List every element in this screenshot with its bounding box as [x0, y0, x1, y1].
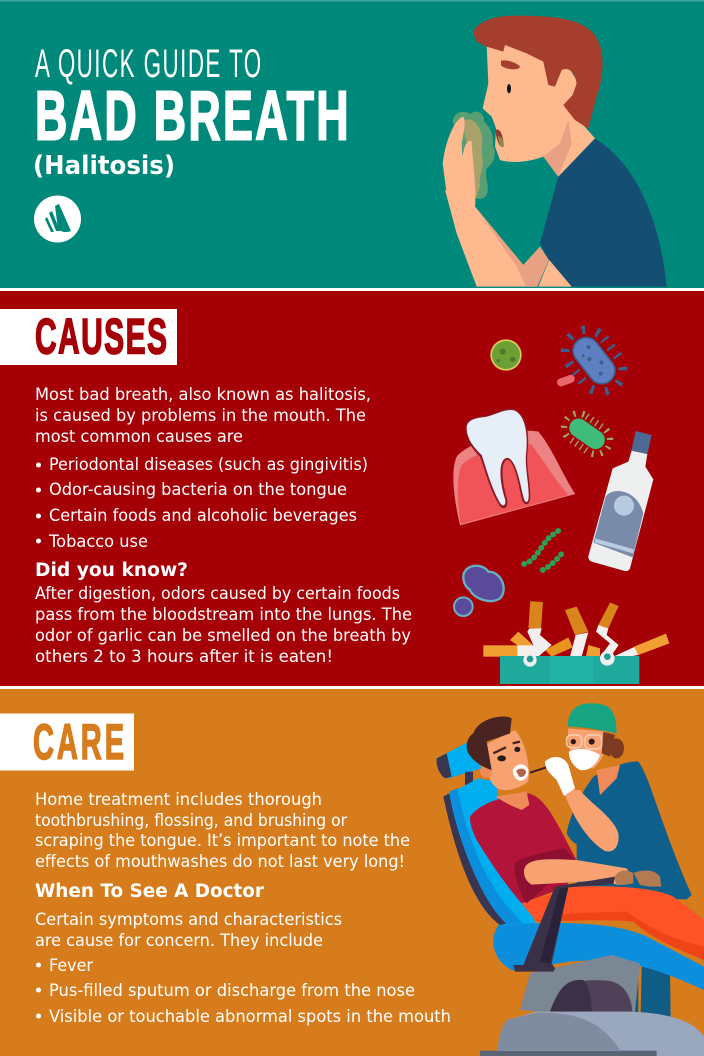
surgical mask — [569, 749, 600, 770]
patient torso — [470, 793, 577, 903]
icon: green germ — [490, 339, 522, 371]
dental tool — [530, 767, 548, 773]
heading: care — [0, 714, 134, 770]
smoke cloud — [453, 112, 495, 199]
icon: pink bacterium — [556, 374, 576, 388]
subheading: did you know: Did you know? — [35, 560, 188, 581]
gloved hand — [545, 757, 575, 796]
icon: bottle — [588, 431, 653, 571]
icon: tooth and gum — [453, 408, 575, 525]
patient legs — [522, 886, 704, 960]
illustration: causes of bad breath — [453, 327, 669, 684]
list: causes: Periodontal diseases (such as gingivitis) — [49, 455, 368, 474]
patient arm — [524, 859, 633, 885]
text block: symptoms intro: Certain symptoms and characteristics — [35, 910, 342, 929]
panel: causes — [0, 291, 704, 686]
patient hands on armrest — [614, 870, 661, 887]
list: causes — [36, 455, 368, 551]
smoke inner — [463, 119, 483, 198]
chair headrest — [437, 743, 482, 778]
text block: home treatment: scraping the tongue. It’s important to note the — [35, 831, 410, 850]
heading: care: CARE — [33, 714, 124, 770]
text block: did you know: After digestion, odors caused by certain foods — [35, 584, 400, 603]
dentist legs — [623, 967, 671, 1020]
list: causes: Odor-causing bacteria on the tongue — [49, 480, 347, 499]
text block: did you know: pass from the bloodstream into the lungs. The — [35, 605, 412, 624]
patient head — [482, 730, 529, 790]
text block: symptoms intro — [35, 910, 342, 950]
dentist torso — [567, 761, 692, 899]
text block: causes intro: most common causes are — [35, 427, 243, 446]
text block: home treatment — [35, 790, 410, 871]
dentist head — [568, 728, 607, 768]
list: causes: Tobacco use — [48, 532, 148, 551]
panel: care — [0, 689, 704, 1056]
text block: did you know: others 2 to 3 hours after it is eaten! — [35, 647, 333, 666]
list: symptoms: Fever — [49, 956, 93, 975]
list: symptoms: Pus-filled sputum or discharge from the nose — [49, 981, 415, 1000]
icon: purple cells — [454, 566, 504, 616]
chair seat — [493, 923, 704, 990]
list: symptoms: Visible or touchable abnormal spots in the mouth — [49, 1007, 451, 1026]
heading: causes: CAUSES — [35, 309, 167, 364]
text block: home treatment: effects of mouthwashes do not last very long! — [35, 852, 405, 871]
subheading: when to see a doctor: When To See A Doctor — [35, 881, 265, 902]
text block: did you know — [35, 584, 412, 666]
illustration: man covering bad breath — [443, 16, 667, 287]
chair armrest — [513, 877, 615, 972]
chair base — [520, 955, 640, 1012]
icon: ashtray with cigarettes — [483, 601, 669, 684]
text block: home treatment: toothbrushing, flossing, and brushing or — [35, 811, 347, 830]
text block: causes intro: is caused by problems in the mouth. The — [35, 406, 366, 425]
text block: home treatment: Home treatment includes thorough — [35, 790, 322, 809]
text block: causes intro — [35, 385, 371, 446]
title: bad breath: BAD BREATH — [35, 78, 349, 155]
icon: blue bacterium — [563, 327, 625, 394]
list: causes: Certain foods and alcoholic beverages — [49, 506, 357, 525]
list: symptoms — [36, 956, 451, 1026]
text block: did you know: odor of garlic can be smelled on the breath by — [35, 626, 411, 645]
text block: causes intro: Most bad breath, also known as halitosis, — [35, 385, 371, 404]
icon: logo — [34, 196, 81, 242]
glasses — [567, 735, 602, 749]
illustration: dentist and patient — [437, 703, 704, 1056]
panel: header — [0, 0, 704, 288]
subtitle: halitosis: (Halitosis) — [33, 151, 175, 181]
icon: green bacterium — [563, 412, 611, 455]
title line: a quick guide to: A QUICK GUIDE TO — [35, 41, 261, 86]
icon: green chain bacteria — [524, 529, 563, 570]
dentist sleeve and arm — [567, 795, 617, 848]
text block: symptoms intro: are cause for concern. They include — [35, 931, 323, 950]
chair back — [443, 778, 537, 925]
